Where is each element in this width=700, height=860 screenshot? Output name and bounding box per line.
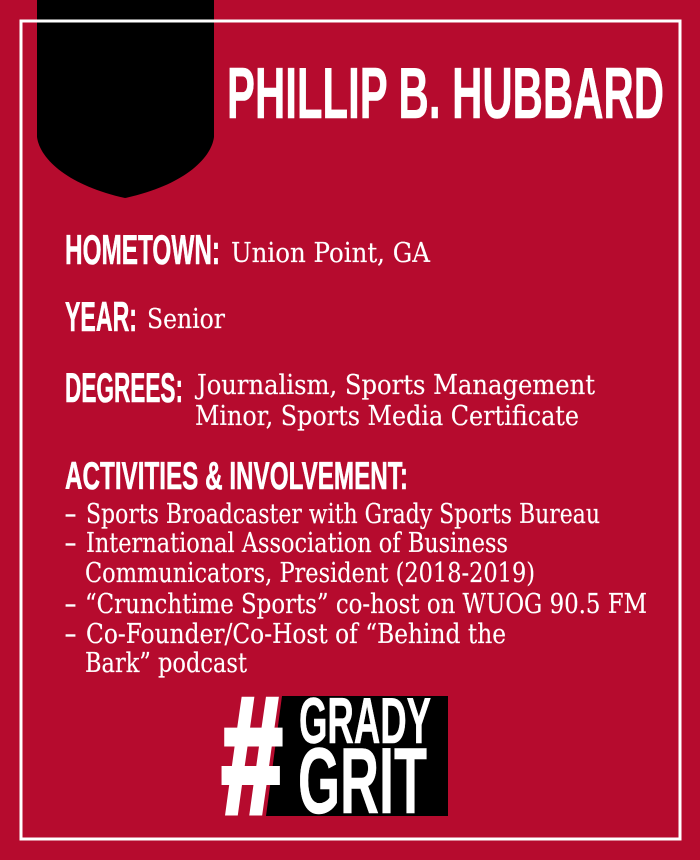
icon: black shield banner (37, 0, 214, 198)
text: degrees value: Journalism, Sports Management (194, 370, 595, 401)
logo: #GradyGrit (222, 664, 448, 847)
list: activities: - (64, 589, 77, 620)
heading: degrees: DEGREES: (65, 364, 183, 411)
logo hash mark: # (222, 664, 282, 847)
logo black background (266, 696, 448, 816)
list: activities (64, 499, 647, 679)
list: activities: - (64, 619, 77, 650)
heading: hometown: HOMETOWN: (65, 226, 220, 273)
list: activities: - (64, 499, 77, 530)
block: year (65, 293, 225, 340)
block: activities and involvement (64, 455, 647, 679)
list: activities: Bark” podcast (85, 648, 247, 679)
text: degrees value (194, 370, 595, 432)
block: hometown (65, 226, 430, 273)
heading: year: YEAR: (65, 293, 137, 340)
list: activities: Communicators, President (2018-2019) (85, 558, 535, 589)
list: activities: International Association of Business (86, 528, 508, 559)
block: degrees (65, 364, 595, 432)
logo word: grit: GRIT (298, 728, 427, 833)
text: year value: Senior (147, 304, 225, 335)
text: degrees value: Minor, Sports Media Certificate (195, 401, 579, 432)
logo word: grady: GRADY (299, 684, 431, 757)
text: hometown value: Union Point, GA (231, 238, 430, 269)
list: activities: - (64, 528, 77, 559)
list: activities: Sports Broadcaster with Grady Sports Bureau (86, 499, 600, 530)
list: activities: Co-Founder/Co-Host of “Behind the (86, 619, 506, 650)
heading: activities and involvement: ACTIVITIES & INVOLVEMENT: (65, 455, 408, 498)
